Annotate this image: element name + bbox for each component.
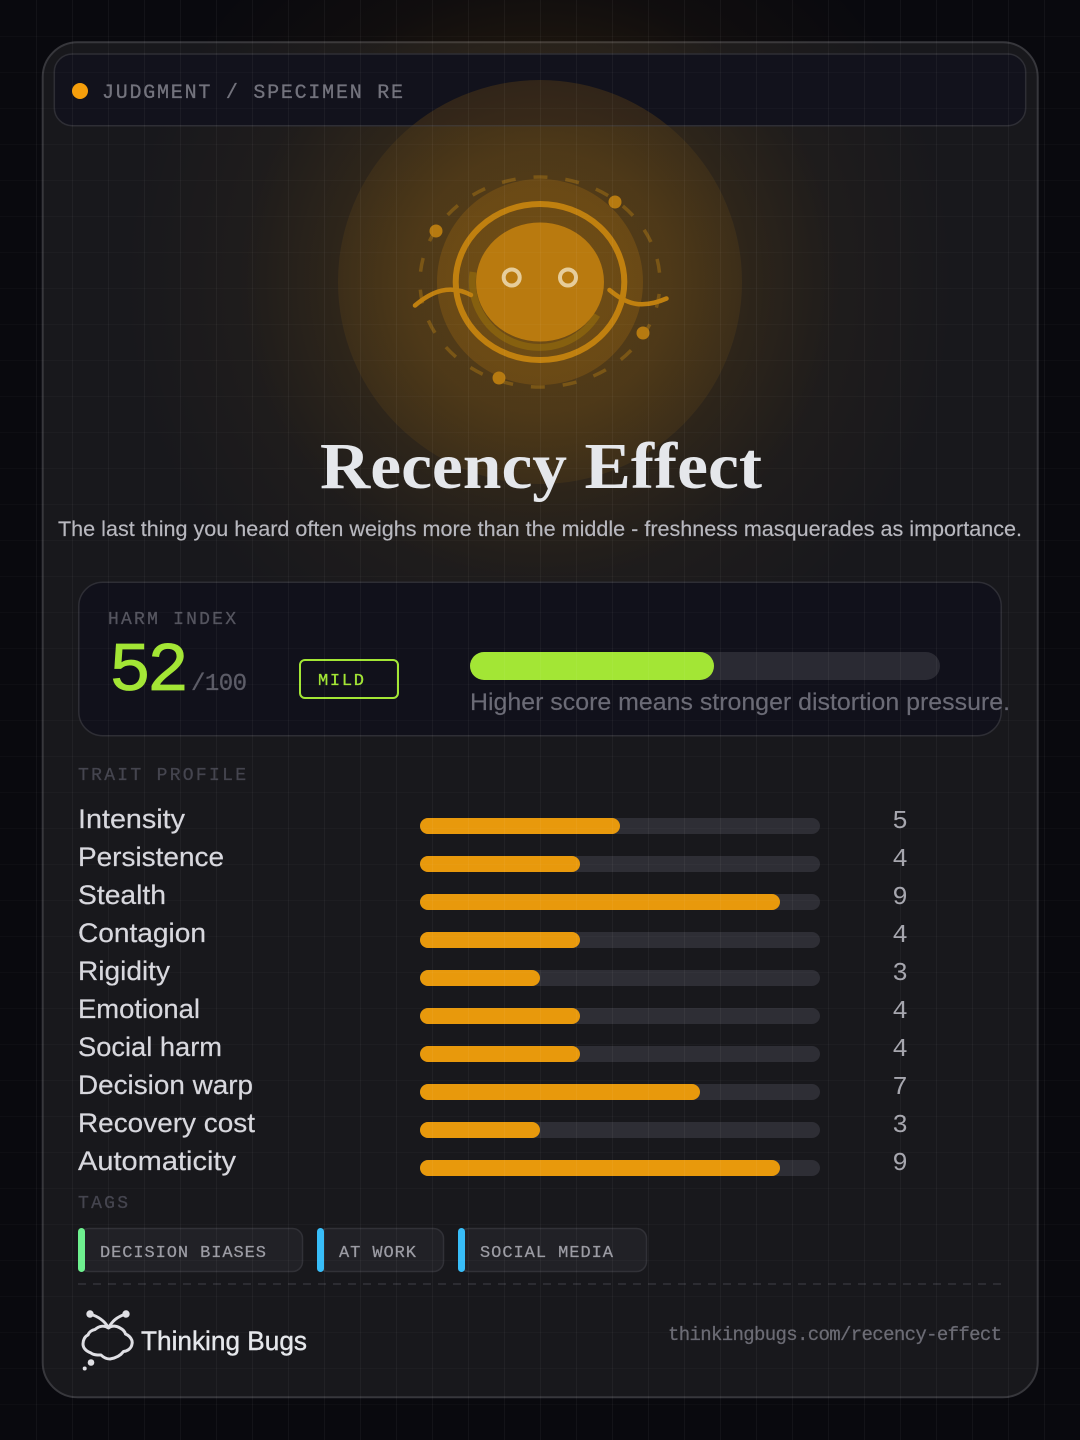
wordmark: Thinking Bugs [141, 1326, 307, 1356]
halo over header [413, 80, 667, 125]
chart: trait bars: Rigidity [78, 956, 171, 986]
chart: trait bars: Decision warp [78, 1070, 253, 1100]
severity badge: MILD [318, 672, 364, 691]
header label: JUDGMENT / SPECIMEN RE [102, 82, 403, 105]
tag: at work [317, 1228, 444, 1272]
logo: thinking bugs [83, 1310, 307, 1370]
chart: trait bars: Automaticity [78, 1146, 237, 1176]
panel: header strip [54, 54, 1026, 126]
chart: trait bars: 4 [892, 1034, 908, 1064]
severity badge [300, 660, 398, 698]
amber radial glow [0, 0, 1080, 720]
harm bar [470, 652, 940, 680]
icon: cloud bug [83, 1314, 132, 1359]
chart: trait bars: Intensity [78, 804, 186, 834]
tag: decision biases: DECISION BIASES [100, 1244, 266, 1263]
subtitle: The last thing you heard often weighs more than the middle - freshness masquerades as importance. [58, 518, 1022, 541]
chart: trait bars: 4 [892, 920, 908, 950]
chart: trait bars: Persistence [78, 842, 224, 872]
head [476, 222, 604, 342]
chart: trait bars: 9 [892, 882, 908, 912]
source url: thinkingbugs.com/recency-effect [668, 1324, 1002, 1346]
score denominator: /100 [191, 671, 247, 698]
chart: trait bars: 9 [892, 1148, 908, 1178]
tag: decision biases [78, 1228, 302, 1272]
tag: social media: SOCIAL MEDIA [480, 1244, 614, 1263]
tag: social media [458, 1228, 646, 1272]
inner halo [437, 179, 643, 385]
orbit dots [430, 196, 650, 384]
panel: harm index [79, 582, 1010, 736]
chart: trait bars: 4 [892, 844, 908, 874]
chart: trait bars: Contagion [78, 918, 206, 948]
tag: at work: AT WORK [339, 1244, 417, 1263]
chart: trait bars: Recovery cost [78, 1108, 256, 1138]
chart: trait bars: Stealth [78, 880, 166, 910]
chart: trait bars: 4 [892, 996, 908, 1026]
harm caption: Higher score means stronger distortion pressure. [470, 689, 1010, 716]
dashed orbit [420, 177, 660, 387]
heading: trait profile: TRAIT PROFILE [78, 766, 246, 786]
chart: trait bars: Social harm [78, 1032, 222, 1062]
harm label: HARM INDEX [108, 610, 236, 630]
chart: trait bars: 3 [892, 1110, 908, 1140]
chart: trait bars: 3 [892, 958, 908, 988]
title: Recency Effect [320, 430, 762, 503]
chart: trait bars: 5 [892, 806, 908, 836]
eyes [504, 270, 576, 286]
heading: tags: TAGS [78, 1194, 128, 1214]
icon: specimen mascot [338, 80, 742, 484]
chart: trait bars: Emotional [78, 994, 200, 1024]
outer halo [338, 80, 742, 484]
smile arc [472, 272, 597, 347]
chart: trait bars [78, 804, 908, 1178]
chart: trait bars: 7 [892, 1072, 908, 1102]
ring [456, 204, 624, 360]
harm score: 52 [109, 633, 189, 712]
icon: status dot [72, 83, 88, 99]
whiskers [415, 290, 666, 306]
